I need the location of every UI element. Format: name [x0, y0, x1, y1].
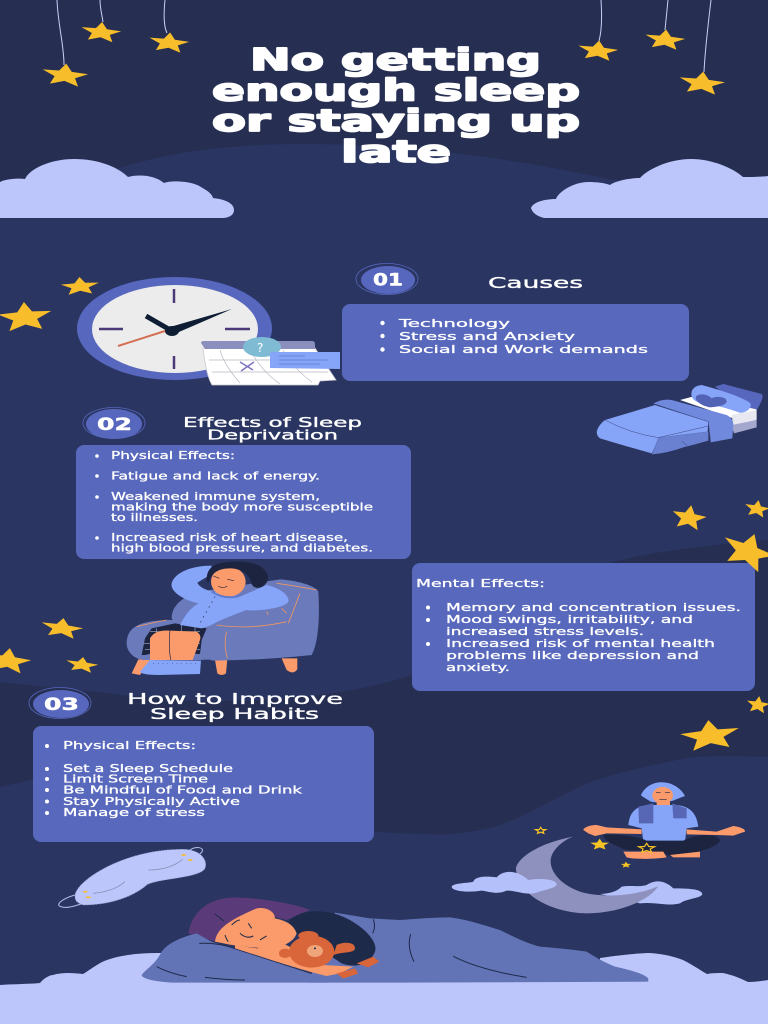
section 03 badge: [29, 688, 91, 718]
star: [718, 525, 768, 576]
star: [670, 502, 708, 531]
title: late: [341, 135, 451, 170]
hanging stars right: [577, 0, 726, 96]
section 01 badge: [356, 264, 418, 294]
panel: causes: Stress and Anxiety: [399, 330, 576, 343]
heading: how to improve sleep habits: How to Improve: [127, 690, 343, 708]
heading: causes: Causes: [488, 274, 583, 292]
bottom cloud: [0, 953, 768, 1024]
panel: causes: Social and Work demands: [399, 343, 649, 356]
panel: how to improve: Physical Effects:: [63, 739, 196, 752]
background: top dark sky: [0, 0, 768, 200]
illustration: man resting in armchair: [127, 562, 319, 675]
calendar: ?: [257, 341, 263, 355]
pillow: [142, 933, 330, 983]
star: [65, 655, 99, 674]
illustration: meditating person on moon: [452, 782, 745, 913]
panel: mental effects: Mental Effects:: [416, 577, 545, 590]
panel: mental effects: problems like depression and: [446, 649, 699, 662]
illustration: sleeping woman with teddy bear: [142, 897, 648, 983]
panel: mental effects: anxiety.: [446, 661, 510, 674]
panel: physical effects: Increased risk of heart disease,: [111, 531, 348, 544]
arm: [235, 943, 353, 976]
title: or staying up: [212, 104, 580, 139]
panel: how to improve: Set a Sleep Schedule: [63, 762, 234, 775]
clock face: [77, 277, 272, 380]
panel: physical effects: Fatigue and lack of energy.: [111, 470, 320, 482]
section 01 badge: 01: [373, 270, 403, 290]
panel: how to improve: Stay Physically Active: [63, 795, 241, 808]
panel: mental effects: [412, 563, 755, 691]
panel: physical effects: making the body more susceptible: [111, 500, 373, 514]
star: [679, 717, 741, 752]
panel: causes: Technology: [397, 317, 511, 330]
meditating person: [583, 782, 745, 859]
heading: effects of sleep deprivation: Effects of Sleep: [183, 415, 362, 431]
blanket: [307, 913, 648, 983]
panel: mental effects: Mood swings, irritability, and: [446, 613, 693, 626]
icon: bed: [597, 384, 763, 454]
teddy bear: [279, 931, 379, 979]
heading: how to improve sleep habits: Sleep Habits: [150, 705, 319, 723]
heading: how to improve sleep habits: [127, 690, 343, 723]
panel: physical effects: high blood pressure, and diabetes.: [111, 542, 373, 554]
panel: physical effects: [76, 445, 411, 559]
star: [0, 300, 52, 332]
panel: mental effects: increased stress levels.: [446, 625, 644, 638]
star: [40, 615, 84, 640]
clock illustration: [77, 277, 340, 385]
title: enough sleep: [212, 74, 580, 108]
hanging stars left: [41, 0, 190, 88]
panel: how to improve: Limit Screen Time: [63, 772, 209, 786]
star: [746, 694, 768, 714]
star: [0, 645, 32, 675]
hair: [188, 897, 310, 942]
cloud left: [0, 159, 234, 218]
panel: mental effects: Increased risk of mental health: [446, 637, 715, 650]
panel: mental effects: Memory and concentration issues.: [446, 601, 741, 614]
title: No getting: [250, 43, 541, 78]
panel: physical effects: Physical Effects:: [111, 449, 235, 462]
panel: how to improve: Be Mindful of Food and Drink: [63, 784, 303, 796]
icon: sleep mask: [59, 848, 206, 907]
star: [744, 498, 768, 518]
heading: effects of sleep deprivation: [183, 415, 362, 444]
panel: physical effects: to illnesses.: [111, 511, 198, 524]
cloud right: [531, 159, 768, 218]
section 03 badge: 03: [44, 695, 79, 715]
heading: effects of sleep deprivation: Deprivation: [207, 428, 338, 444]
panel: how to improve: Manage of stress: [63, 806, 206, 819]
panel: physical effects: Weakened immune system,: [111, 490, 320, 503]
cloud behind moon: [600, 881, 702, 904]
face: [215, 908, 297, 948]
star: [61, 276, 99, 295]
section 02 badge: 02: [97, 415, 132, 435]
background: middle dark wave: [0, 540, 768, 834]
panel: causes: [342, 304, 689, 381]
calendar: [201, 337, 340, 385]
cloud over moon: [452, 872, 557, 894]
panel: how to improve: [33, 726, 374, 842]
crescent moon: [516, 837, 658, 913]
title: [212, 43, 580, 170]
section 02 badge: [83, 408, 145, 439]
body: [288, 911, 376, 966]
